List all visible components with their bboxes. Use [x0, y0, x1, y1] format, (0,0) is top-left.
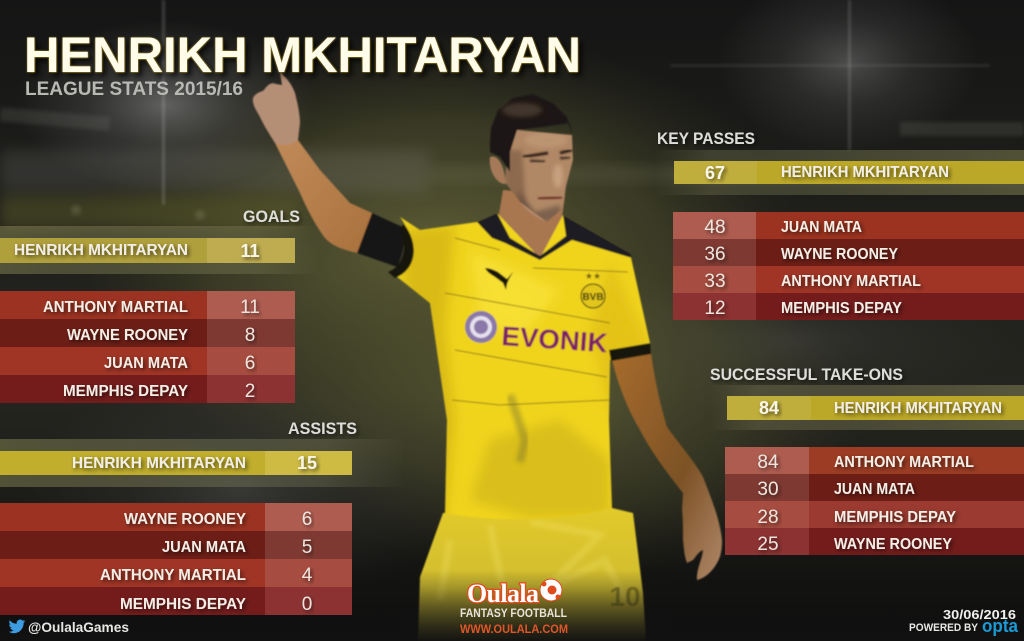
- table: assists rivals: [0, 503, 352, 615]
- panel: assists: [0, 419, 405, 615]
- table: key passes rivals: 48: [704, 217, 726, 238]
- jersey stripes: [445, 238, 628, 405]
- table: key passes rivals: WAYNE ROONEY: [781, 246, 899, 263]
- heading: goals: GOALS: [243, 207, 300, 226]
- jersey: [396, 212, 651, 519]
- Bundesliga badge: [465, 311, 497, 343]
- bottom fade over player: [400, 570, 670, 641]
- table: key passes rivals: 12: [704, 298, 726, 319]
- table: key passes rivals: JUAN MATA: [781, 219, 862, 236]
- heading: assists: ASSISTS: [288, 419, 357, 438]
- table: key passes rivals: 36: [704, 244, 726, 265]
- highlight row: Mkhitaryan take-ons: HENRIKH MKHITARYAN: [834, 400, 1002, 417]
- table: assists rivals: MEMPHIS DEPAY: [120, 596, 247, 613]
- highlight row: Mkhitaryan assists: HENRIKH MKHITARYAN: [72, 455, 246, 472]
- collar: [477, 213, 632, 260]
- date and Opta credit: [909, 607, 1019, 636]
- icon: twitter bird: [8, 620, 25, 633]
- table: key passes rivals: ANTHONY MARTIAL: [781, 273, 921, 290]
- table: take-ons rivals: WAYNE ROONEY: [834, 536, 953, 553]
- hair: [490, 94, 572, 172]
- handle text: @OulalaGames: [28, 619, 129, 635]
- table: take-ons rivals: MEMPHIS DEPAY: [834, 509, 957, 526]
- table: take-ons rivals: [725, 447, 1024, 555]
- table: goals rivals: 2: [245, 381, 255, 402]
- table: assists rivals: 4: [302, 565, 313, 586]
- table: assists rivals: 6: [302, 509, 312, 530]
- table: assists rivals: 0: [302, 594, 312, 615]
- subtitle: LEAGUE STATS 2015/16: [25, 78, 243, 100]
- player photo illustration: [253, 72, 722, 641]
- table: assists rivals: 5: [302, 537, 312, 558]
- table: key passes rivals: 33: [704, 271, 726, 292]
- dirt stain: [510, 395, 525, 462]
- jersey shading: [400, 225, 455, 520]
- table: goals rivals: 6: [245, 353, 255, 374]
- BVB crest: [581, 271, 605, 308]
- eyebrows and eyes: [523, 150, 572, 157]
- table: assists rivals: WAYNE ROONEY: [124, 511, 247, 528]
- armband: [357, 213, 405, 267]
- sponsor EVONIK: EVONIK: [501, 321, 609, 358]
- table: key passes rivals: MEMPHIS DEPAY: [781, 300, 903, 317]
- sleeve cuff on raised arm: [388, 224, 414, 278]
- website: WWW.OULALA.COM: [460, 622, 568, 636]
- table: take-ons rivals: 28: [757, 507, 779, 528]
- highlight row: Mkhitaryan goals: 11: [240, 241, 260, 261]
- raised hand: [253, 72, 300, 145]
- icon: football: [540, 579, 562, 601]
- title block: [24, 27, 581, 100]
- BVB crest: ★★: [585, 271, 601, 281]
- table: goals rivals: WAYNE ROONEY: [67, 327, 189, 344]
- opta logo: opta: [982, 616, 1019, 636]
- panel: key passes: [655, 129, 1024, 320]
- ear: [490, 157, 506, 184]
- table: goals rivals: 11: [240, 297, 260, 318]
- table: take-ons rivals: ANTHONY MARTIAL: [834, 454, 974, 471]
- powered by: POWERED BY: [909, 622, 979, 634]
- highlight row: Mkhitaryan take-ons: 84: [759, 398, 779, 418]
- table: assists rivals: ANTHONY MARTIAL: [100, 567, 246, 584]
- panel: goals: [0, 207, 320, 403]
- BVB crest: BVB: [582, 292, 604, 303]
- table: goals rivals: 8: [245, 325, 255, 346]
- table: take-ons rivals: 30: [757, 479, 779, 500]
- table: take-ons rivals: JUAN MATA: [834, 481, 915, 498]
- table: assists rivals: JUAN MATA: [162, 539, 246, 556]
- table: goals rivals: JUAN MATA: [104, 355, 188, 372]
- head: [490, 94, 573, 225]
- highlight row: Mkhitaryan key passes: HENRIKH MKHITARYAN: [781, 164, 949, 181]
- highlight row: Mkhitaryan goals: [0, 226, 320, 274]
- Oulala logo and links: [460, 579, 568, 636]
- highlight row: Mkhitaryan key passes: 67: [705, 163, 725, 183]
- date: 30/06/2016: [943, 607, 1016, 622]
- table: goals rivals: ANTHONY MARTIAL: [43, 299, 188, 316]
- sleeve cuff: [609, 343, 651, 361]
- logo wordmark: Oulala: [467, 579, 539, 608]
- panel: successful take-ons: [710, 365, 1024, 555]
- highlight row: Mkhitaryan take-ons: [710, 385, 1024, 430]
- title: HENRIKH MKHITARYAN: [24, 27, 581, 83]
- neck: [498, 190, 565, 258]
- twitter handle: [8, 619, 129, 635]
- raised arm: [275, 140, 376, 253]
- fantasy football label: FANTASY FOOTBALL: [460, 606, 567, 620]
- table: goals rivals: [0, 291, 295, 403]
- face: [505, 130, 573, 222]
- highlight row: Mkhitaryan assists: 15: [297, 453, 317, 473]
- heading: successful take-ons: SUCCESSFUL TAKE-ONS: [710, 365, 903, 384]
- Puma logo: [485, 268, 513, 290]
- shorts: [418, 508, 646, 641]
- shorts folds: [440, 522, 625, 600]
- mouth: [538, 197, 562, 199]
- table: goals rivals: MEMPHIS DEPAY: [63, 383, 189, 400]
- highlight row: Mkhitaryan key passes: [655, 150, 1024, 195]
- table: key passes rivals: [673, 212, 1024, 320]
- table: take-ons rivals: 84: [757, 452, 779, 473]
- shirt number: 10: [609, 581, 641, 612]
- heading: key passes: KEY PASSES: [657, 129, 755, 148]
- lower arm: [612, 345, 722, 580]
- highlight row: Mkhitaryan goals: HENRIKH MKHITARYAN: [14, 242, 188, 259]
- highlight row: Mkhitaryan assists: [0, 439, 405, 487]
- table: take-ons rivals: 25: [757, 534, 779, 555]
